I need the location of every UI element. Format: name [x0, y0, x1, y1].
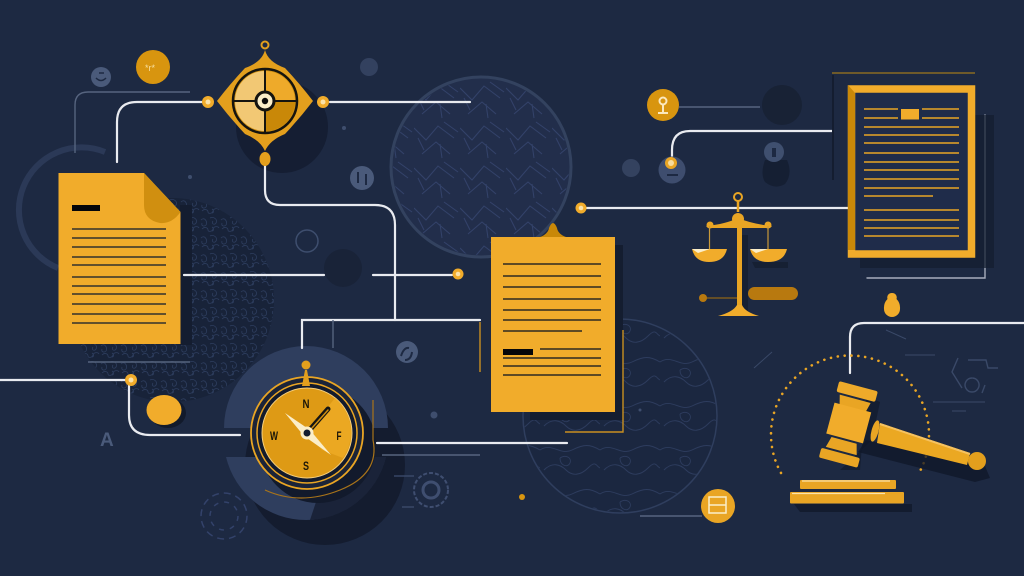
- letter A: A: [100, 430, 114, 451]
- stamp: [901, 109, 919, 120]
- icon: gear outline: [394, 473, 448, 507]
- thin grey connectors: [75, 92, 760, 516]
- icon: play badge: [360, 58, 378, 76]
- document 2 gold accent lines: [480, 322, 623, 432]
- text lines: [503, 264, 601, 375]
- icon: gold coin top left: [136, 50, 170, 84]
- icon: keyhole badge: [764, 142, 784, 162]
- icon: gold coin top left: *r*: [145, 63, 155, 73]
- document 2: yellow page with clip: [491, 223, 615, 412]
- gavel with dotted arc: [771, 356, 990, 512]
- icon: bottom gold badge: [701, 489, 735, 523]
- clip: [540, 223, 566, 237]
- icon: clock outline: [296, 230, 318, 252]
- icon: swirl badge: [396, 341, 418, 363]
- compass letters: W: [270, 429, 278, 443]
- document 3: framed navy page: [832, 73, 975, 254]
- document 2: shadow: [530, 245, 623, 420]
- icon: gold oval: [146, 395, 186, 428]
- document 1: yellow page: [58, 173, 180, 344]
- icon: smiley badge: [91, 67, 111, 87]
- compass letters: F: [336, 429, 342, 443]
- compass letters: S: [303, 459, 309, 473]
- handle: [877, 423, 970, 465]
- icon: gold user badge: [647, 89, 679, 121]
- compass letters: [270, 397, 342, 473]
- folded corner: [144, 173, 180, 223]
- icon: link badge: [350, 166, 374, 190]
- scales of justice: [692, 193, 798, 316]
- tiny dots: [188, 126, 642, 418]
- needle: [285, 413, 331, 455]
- small decorative icons: [91, 58, 784, 451]
- small gold dot: [519, 494, 525, 500]
- document 1: shadow: [180, 205, 192, 345]
- head: [819, 381, 878, 468]
- side pill and slider: [748, 287, 798, 300]
- base: [800, 480, 896, 489]
- icon: gold keyhole: [884, 293, 900, 317]
- heading bar: [72, 205, 100, 211]
- text lines: [864, 109, 959, 236]
- background decor: globes and textures: [19, 77, 802, 545]
- connector end badge: [658, 156, 686, 184]
- icon: faint sketch lower right: [754, 330, 998, 411]
- target compass emblem top: [217, 42, 313, 166]
- icon: faint dashed dial: [201, 493, 247, 539]
- compass letters: N: [302, 397, 310, 411]
- document 3: shadow: [860, 115, 994, 268]
- connector dots: [125, 96, 586, 386]
- black highlight: [503, 349, 533, 355]
- icon: small dot: [622, 159, 640, 177]
- connector lines: [0, 102, 1024, 443]
- compass: [224, 346, 388, 520]
- body lines: [72, 229, 166, 323]
